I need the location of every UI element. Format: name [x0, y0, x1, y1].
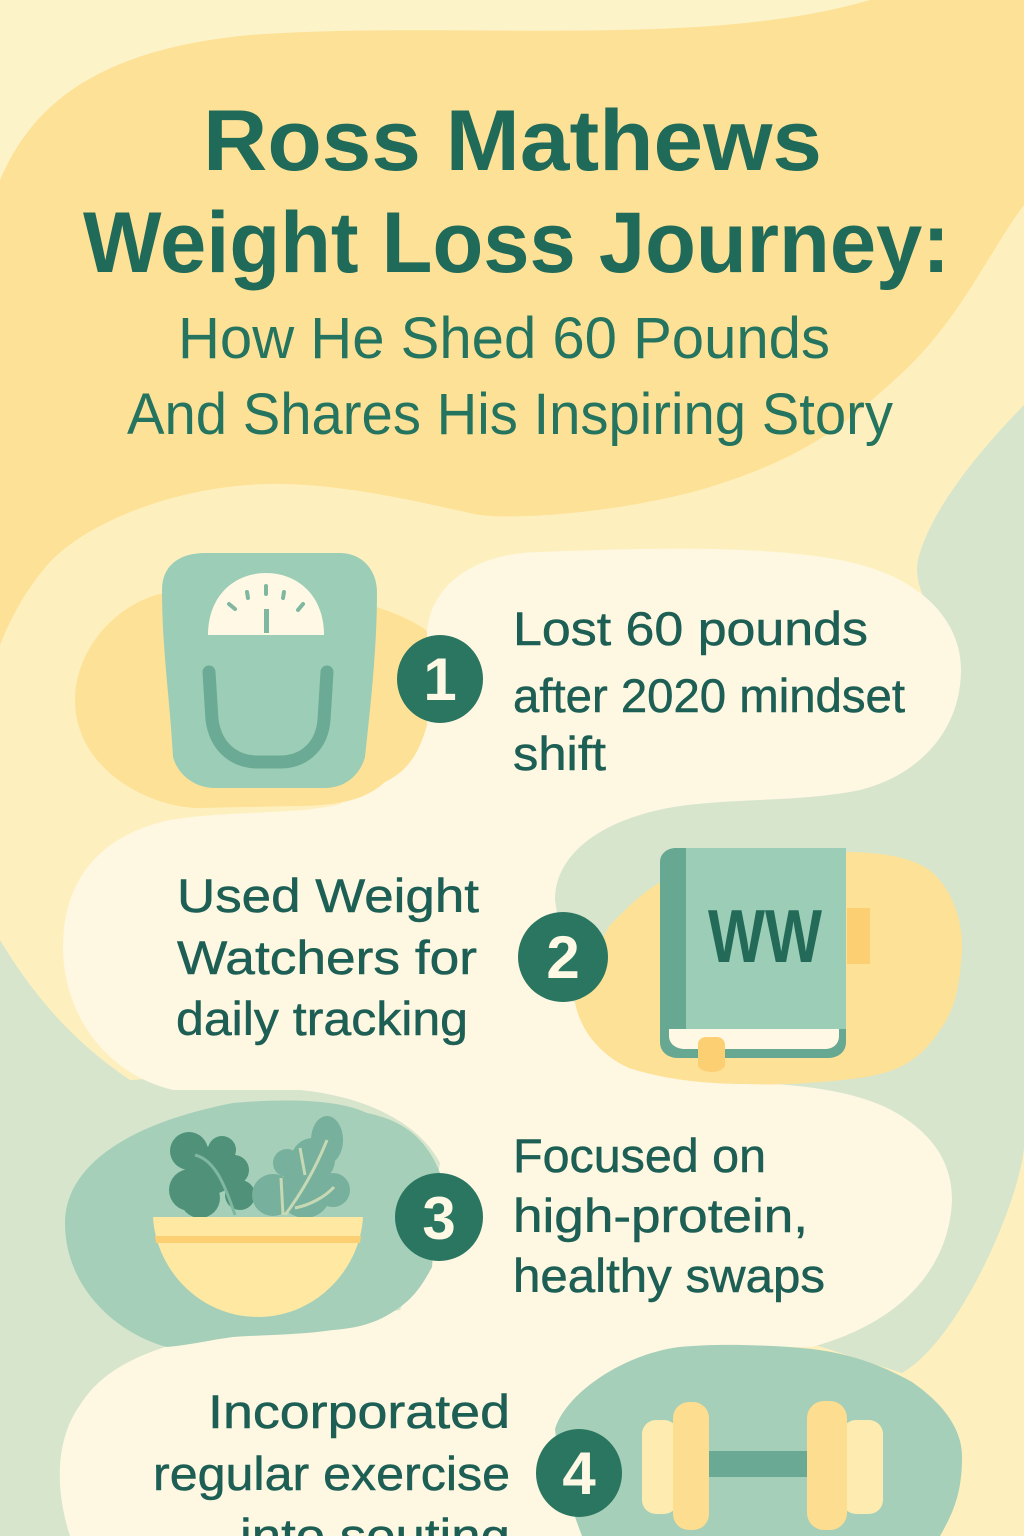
subtitle: And Shares His Inspiring Story — [127, 382, 893, 447]
step 3 text: high-protein, — [513, 1189, 808, 1242]
badge 2: 2 — [546, 924, 580, 991]
icon: salad bowl — [153, 1116, 363, 1317]
badge 3: 3 — [422, 1185, 456, 1252]
icon: WW journal — [660, 848, 870, 1072]
subtitle: How He Shed 60 Pounds — [178, 306, 830, 371]
badge 2 — [518, 912, 608, 1002]
step 2 background blob — [575, 852, 962, 1084]
title: Ross Mathews — [203, 93, 822, 189]
step 4 text: Incorporated — [208, 1385, 510, 1438]
step 3 text — [513, 1129, 825, 1302]
step 2 text: daily tracking — [176, 992, 468, 1045]
step 4 text: regular exercise — [153, 1447, 510, 1500]
badge 1 — [397, 635, 483, 723]
step 1 text: shift — [513, 727, 606, 780]
title: Weight Loss Journey: — [83, 195, 950, 291]
dark leaf — [169, 1132, 255, 1218]
step 3 background blob — [65, 1100, 440, 1347]
step 1 text: after 2020 mindset — [513, 669, 905, 722]
step 3 text: healthy swaps — [513, 1249, 825, 1302]
icon: bathroom scale — [162, 553, 377, 788]
step 1 text: Lost 60 pounds — [513, 602, 868, 655]
step 2 text — [176, 869, 479, 1045]
subtitle — [127, 306, 893, 447]
step 1 text — [513, 602, 905, 780]
step 3 text: Focused on — [513, 1129, 766, 1182]
badge 4 — [536, 1429, 622, 1517]
badge 3 — [395, 1173, 483, 1261]
step 4 background blob — [555, 1345, 962, 1536]
step 1 background blob — [75, 590, 427, 808]
step 4 text — [153, 1385, 510, 1536]
badge 4: 4 — [562, 1440, 596, 1507]
badge 1: 1 — [423, 646, 457, 713]
icon: WW journal: WW — [708, 894, 822, 978]
light leaf — [252, 1116, 350, 1218]
step 2 text: Used Weight — [177, 869, 479, 922]
title — [83, 93, 950, 291]
icon: dumbbell — [642, 1401, 883, 1530]
step 2 text: Watchers for — [177, 931, 477, 984]
